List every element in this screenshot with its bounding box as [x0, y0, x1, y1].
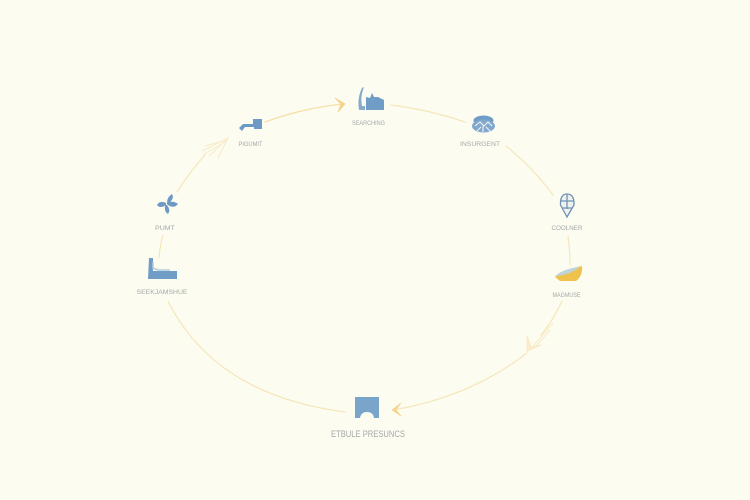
icon: map pin — [560, 194, 574, 217]
icon: factory — [366, 93, 384, 110]
node: top centre — [352, 87, 385, 127]
node: left fan — [155, 194, 178, 232]
arrow: bottom — [392, 403, 401, 416]
icon: fan — [157, 194, 178, 214]
label: upper left: PIGUMIT — [238, 141, 263, 148]
label: fan: PUMT — [155, 225, 175, 232]
icon: yellow shell — [555, 266, 582, 281]
icon: tree cluster — [472, 116, 495, 132]
arrow: upper left feathered — [202, 138, 228, 158]
node: upper right — [460, 116, 500, 148]
label: left lower: SEEKJAMSHUE — [136, 289, 188, 296]
icon: bed machine — [148, 258, 177, 279]
arrow: lower right feathered — [527, 323, 553, 351]
label: top centre: SEARCHING — [352, 120, 385, 127]
icon: pipe valve — [239, 119, 262, 131]
label: right lower: MAGMUSE — [552, 292, 581, 299]
node: bottom — [331, 397, 405, 439]
node: left lower — [136, 258, 188, 296]
node: right cooler — [552, 194, 583, 232]
label: bottom: ETBULE PRESUNCS — [331, 429, 405, 439]
node: upper left — [238, 119, 263, 148]
connecting arcs — [159, 104, 570, 412]
icon: gate block — [355, 397, 379, 418]
label: upper right: INSURGENT — [460, 141, 500, 148]
arrow: top — [335, 98, 345, 112]
label: cooler: COOLNER — [552, 225, 583, 232]
node: right lower — [552, 266, 582, 299]
